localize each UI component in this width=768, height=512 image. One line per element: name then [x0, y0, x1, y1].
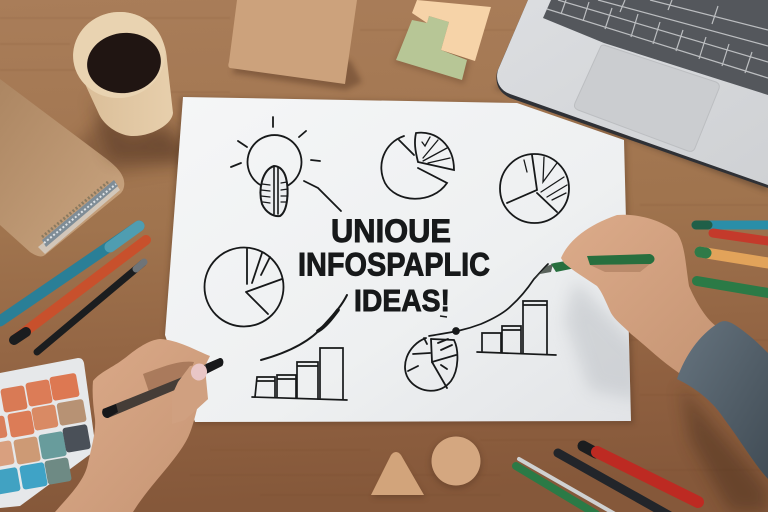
wooden circle — [430, 436, 482, 489]
title text: INFOSPAPLIC — [298, 246, 490, 282]
doodle: top pie chart — [381, 133, 454, 199]
right-side pens — [696, 225, 768, 293]
top tan notepad — [228, 0, 362, 90]
title text: IDEAS! — [354, 283, 450, 318]
thumb — [172, 366, 208, 424]
keyboard — [543, 0, 768, 95]
doodle: light bulb — [231, 117, 341, 216]
paper sheet — [165, 97, 640, 424]
trackpad — [574, 45, 719, 151]
finger shadow gap — [143, 362, 194, 395]
doodle: left pie chart — [204, 248, 284, 326]
doodle: right bar chart and pen curve — [429, 264, 556, 355]
doodle: right pie chart — [500, 154, 569, 223]
pen over hand — [587, 254, 654, 265]
title text — [298, 213, 490, 318]
bottom pens — [516, 446, 698, 512]
green pen — [551, 254, 654, 272]
doodle: left bar chart and curve — [252, 295, 347, 400]
dark pen — [102, 358, 223, 418]
fingernail — [189, 362, 209, 382]
doodle: bottom pie chart — [405, 338, 457, 391]
shirt sleeve — [677, 321, 768, 512]
left hand with dark pen — [55, 339, 223, 512]
coffee cup — [67, 6, 190, 160]
left-side pens — [0, 226, 146, 352]
laptop — [494, 0, 768, 192]
left tan folder — [0, 79, 200, 256]
title text: UNIOUE — [331, 213, 451, 249]
wooden triangle — [371, 452, 426, 498]
right hand with green pen — [534, 215, 716, 373]
color swatch palette — [0, 358, 96, 508]
pen nib — [534, 264, 553, 279]
sticky notes — [394, 0, 491, 84]
